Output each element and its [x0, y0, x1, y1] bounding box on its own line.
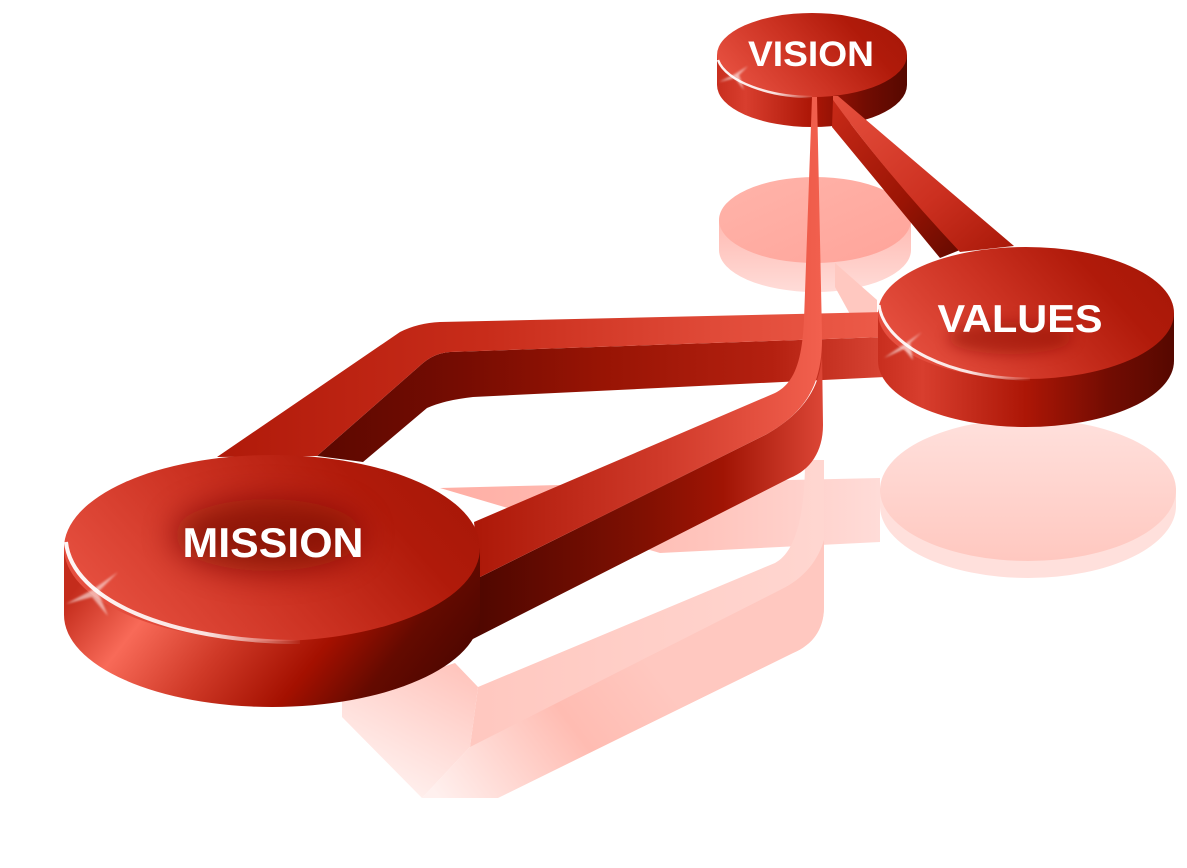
- label: vision: VISION: [748, 35, 874, 74]
- disc: mission: [64, 455, 480, 707]
- label: values: VALUES: [938, 298, 1102, 341]
- reflection: vision disc: [719, 177, 911, 292]
- band: vision to values: [832, 96, 1014, 258]
- band: mission to vision: [465, 97, 823, 643]
- band: mission to values: [217, 312, 885, 462]
- icon: vision sparkle: [719, 66, 748, 90]
- reflection: values disc: [880, 419, 1176, 578]
- reflection: connecting bands: [342, 263, 880, 798]
- disc: vision: [717, 13, 907, 127]
- icon: mission sparkle: [66, 572, 118, 616]
- icon: values sparkle: [884, 332, 922, 360]
- label: mission: MISSION: [182, 519, 364, 566]
- disc: values: [878, 247, 1174, 427]
